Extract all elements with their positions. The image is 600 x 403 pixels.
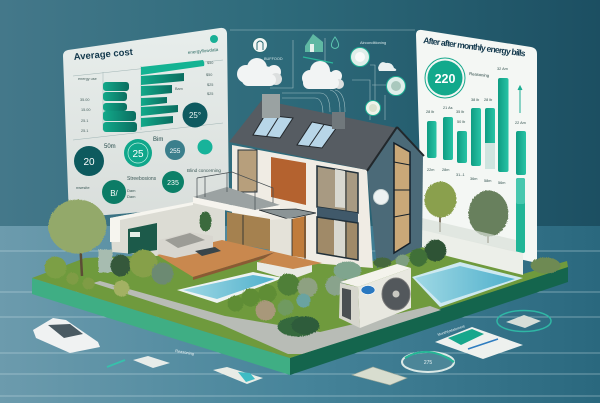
arrow: bill trend [518,86,522,113]
bar labels: 21 As [443,106,453,110]
upper right window [317,166,358,213]
label: heading over icons: Airconditioning [360,40,386,45]
label: energy flow: energyflowdata [188,47,219,55]
solar panels right [297,122,337,148]
floor item: papers [107,356,170,368]
shrubs: left garden [44,249,173,296]
floor item: report [435,327,523,359]
chimney right [332,112,345,129]
stat captions: Streebosions [127,176,157,182]
stat ring 220 [425,58,465,98]
fence [422,230,523,275]
chart labels: $50 [206,73,212,77]
chart labels: $25 [207,92,213,96]
front wall [232,145,373,268]
bar labels: 38 lb [471,98,479,102]
icon: small cloud [378,62,396,71]
canopy [259,209,316,219]
stat circle B [102,180,126,204]
unit fan [382,278,410,310]
panel: average cost [63,28,229,218]
pool: left [177,272,283,303]
chart labels: $50 [207,61,213,65]
shrubs: beside house [373,239,560,273]
panel: monthly energy bills [416,30,537,263]
roof [229,100,397,170]
patio wall edge [110,202,193,242]
unit logo [361,286,375,294]
bar labels [426,67,526,185]
deck edge [193,252,275,280]
floor [0,226,600,403]
bar labels: 28m [442,168,449,172]
bar labels: 56m [498,181,505,185]
fence backing [422,218,516,252]
tree: panel right [468,190,508,243]
cloud left [237,58,282,86]
icon: accent line [303,57,333,63]
heading: monthly bills: After after monthly energy bills [423,35,526,58]
bar chart: right column [141,60,204,127]
tree: panel left [424,181,456,232]
icon: small house [305,34,323,52]
tree: garden [48,199,106,276]
bar labels: 28 lb [484,98,492,102]
floor item: ring gauge right [497,310,551,332]
chart labels: Bam [175,87,183,91]
stat circle 255: 255 [170,148,181,155]
gable wall [367,128,423,268]
chart labels: energy use [78,77,97,81]
chimney left [262,94,280,118]
tall gable window [394,143,410,253]
storage cabinet [128,223,157,254]
stat circle 25 green [124,139,152,167]
chart labels: 15.00 [81,108,91,112]
coffee table [195,247,221,256]
stat captions: 50m [104,144,116,150]
stat captions: Blind concerning [187,168,221,173]
stat circle B: B/ [110,189,119,198]
entry wall [270,217,305,262]
canopy posts [243,215,305,270]
floor item: money [352,367,407,385]
balcony [193,172,280,217]
air conditioning unit [339,264,411,328]
upper left window [238,150,257,192]
bar labels: 50 lb [457,120,465,124]
stat circle 255 [165,140,185,160]
icon: panel badge [210,35,218,43]
chart labels: 25.1 [81,129,88,133]
slate band [317,207,358,224]
bar labels: 22 Am [515,121,526,125]
ground floor opening [227,212,270,250]
deck [157,240,275,277]
chart labels [78,61,213,133]
cloud right [302,61,344,89]
potted plant [199,211,211,231]
shrubs: front garden [227,261,361,336]
bar chart: monthly bills [427,78,526,253]
stat circle 235: 235 [167,180,179,187]
car [33,318,100,353]
stat ring 220: 220 [435,72,455,86]
house [193,94,424,270]
entry steps [257,262,312,280]
gravel path [93,281,441,354]
ground platform [32,247,568,375]
bar labels: Reasoning [469,71,490,78]
lower right window [317,217,358,260]
chart labels: 35.00 [80,98,90,102]
icon: round sensor middle [386,76,406,96]
floor item: report title: Monthlystatement [437,324,465,337]
stat circle 20 [74,146,104,176]
chart labels: $25 [207,83,213,87]
stat captions: Dam [127,194,136,199]
label: surveys: BUFFOOD [264,57,283,61]
chart labels: 25.1 [81,119,88,123]
floor item: ring gauge left [402,352,454,372]
stat captions: nwesite [76,185,90,190]
bar labels: 28 lb [426,110,434,114]
entry door [292,216,306,258]
background wall [0,0,600,228]
icon: round sensor low [366,100,380,116]
stat circle 25 dark: 25° [189,111,201,120]
floor item: label: Reasoning [175,348,195,356]
stat captions: Dam [127,188,136,193]
icon: round sensor top [350,48,370,66]
pool: right [412,262,523,307]
heading: average cost: Average cost [73,47,134,63]
bar labels: 32 Am [497,67,508,71]
stat circle 20: 20 [83,157,95,168]
solar panels left [253,115,293,138]
entry deck [258,252,322,269]
stat captions: Bim [153,137,163,143]
bar labels: 35 lb [456,110,464,114]
bar labels: 36m [470,177,477,181]
round badge [374,190,388,204]
wood cladding [271,157,306,205]
bar labels: 22m [427,168,434,172]
bar labels: 58m [484,179,491,183]
sofa [158,232,213,258]
icon: water drop [331,37,339,48]
bar chart: left column [103,82,137,132]
floor item: ring gauge left: 275 [424,360,432,366]
patio walls [110,202,225,256]
stat circle 25 green: 25 [132,149,144,160]
stat circle small [198,140,212,154]
stat circle 25 dark [182,102,208,128]
stat circle 235 [162,171,184,193]
icon: round arch [252,38,268,52]
stat captions [76,137,221,199]
diagram lines [230,30,415,120]
bar labels: 31.-1 [456,173,465,177]
floor item: booklet [213,367,263,384]
